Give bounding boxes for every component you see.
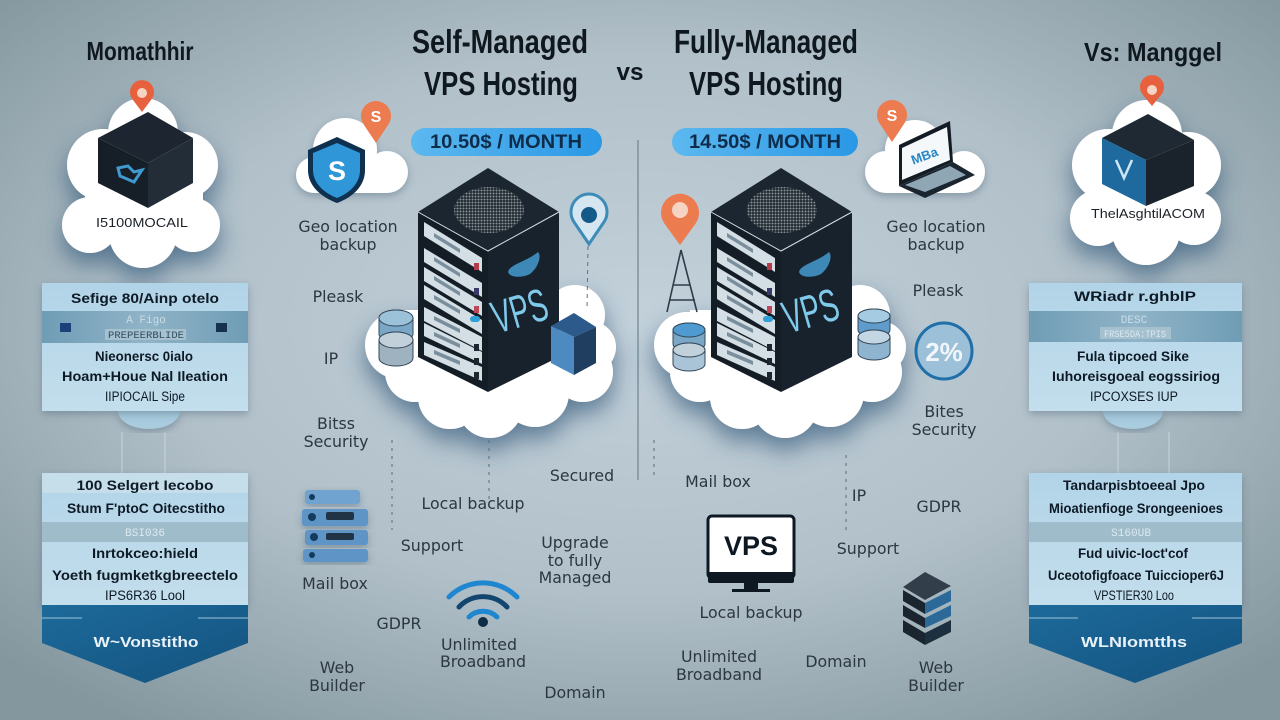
icon: database stack far right xyxy=(858,309,890,360)
left feature labels: Support xyxy=(401,536,463,555)
panel: right lower: Fud uivic-Ioct'cof xyxy=(1078,546,1188,561)
icon: VPS monitor xyxy=(708,516,794,592)
icon: dark cube xyxy=(98,112,193,208)
icon: orange pin: S xyxy=(887,108,898,125)
icon: VPS monitor: VPS xyxy=(724,531,778,561)
title: fully-managed: Fully-Managed xyxy=(674,23,858,60)
panel: left lower: IPS6R36 Lool xyxy=(105,588,185,603)
dotted connector lines xyxy=(392,440,846,530)
panel: left lower: BSI036 xyxy=(125,528,165,540)
icon: red pin xyxy=(1140,75,1164,106)
right feature labels: Geo location xyxy=(886,217,986,236)
left feature labels: Unlimited xyxy=(441,635,517,654)
left feature labels: Builder xyxy=(309,676,365,695)
title: self-managed: VPS Hosting xyxy=(424,65,578,102)
right feature labels: Local backup xyxy=(699,603,803,622)
panel: left lower: Inrtokceo:hield xyxy=(92,546,198,561)
left feature labels: Broadband xyxy=(440,652,526,671)
cloud caption: ThelAsghtilACOM xyxy=(1091,206,1205,221)
vs label: vs xyxy=(616,59,644,86)
ribbon: right: WLNIomtths xyxy=(1081,634,1187,651)
icon: orange pin with tower xyxy=(661,194,699,312)
small cloud with laptop xyxy=(865,100,985,198)
server: fully-managed: VPS xyxy=(777,278,845,343)
left feature labels: backup xyxy=(319,235,377,254)
cloud caption: I5100MOCAIL xyxy=(96,215,188,230)
panel: right lower: Mioatienfioge Srongeenioes xyxy=(1049,501,1223,516)
price pill: fully-managed: 14.50$ / MONTH xyxy=(689,132,841,153)
right feature labels: Mail box xyxy=(685,472,751,491)
panel: right lower: VPSTIER30 Loo xyxy=(1094,588,1174,603)
ribbon: left xyxy=(42,605,248,683)
right feature labels: backup xyxy=(907,235,965,254)
icon: database stack right xyxy=(673,323,705,371)
left feature labels: to fully xyxy=(548,551,602,570)
left feature labels: Local backup xyxy=(421,494,525,513)
ribbon: right xyxy=(1029,605,1242,683)
panel: left upper: Nieonersc 0ialo xyxy=(95,349,193,364)
left feature labels: IP xyxy=(324,349,338,368)
left feature labels: Mail box xyxy=(302,574,368,593)
left feature labels: Managed xyxy=(539,568,611,587)
left feature labels: Domain xyxy=(544,683,606,702)
title: fully-managed xyxy=(674,23,858,102)
icon: percent dial: 2% xyxy=(925,337,963,367)
icon: wifi xyxy=(449,583,517,627)
price pill: self-managed xyxy=(411,128,602,156)
icon: shield: S xyxy=(328,156,346,186)
blue logo xyxy=(508,252,540,277)
left feature labels: Upgrade xyxy=(541,533,609,552)
icon: stacked servers xyxy=(302,490,368,562)
panel: left upper: Hoam+Houe Nal Ileation xyxy=(62,369,228,384)
left feature labels: Pleask xyxy=(313,287,364,306)
server: self-managed: VPS xyxy=(486,278,554,343)
panel: right upper: IPCOXSES IUP xyxy=(1090,389,1178,404)
right feature labels: Security xyxy=(912,420,976,439)
ribbon: left: W~Vonstitho xyxy=(94,634,198,651)
panel: right lower xyxy=(1029,473,1242,605)
blue logo xyxy=(799,252,831,277)
right feature labels: Pleask xyxy=(913,281,964,300)
price pill: fully-managed xyxy=(672,128,858,156)
panel: left upper xyxy=(42,283,248,429)
panel: right lower: Tandarpisbtoeeal Jpo xyxy=(1063,478,1205,493)
right feature labels: Builder xyxy=(908,676,964,695)
right feature labels: Domain xyxy=(805,652,867,671)
left feature labels: Web xyxy=(320,658,354,677)
small cloud with shield xyxy=(296,101,408,203)
cloud: right server base xyxy=(654,285,906,438)
right feature labels: Web xyxy=(919,658,953,677)
server: self-managed xyxy=(418,168,559,392)
icon: percent dial xyxy=(916,323,972,379)
right feature labels: Support xyxy=(837,539,899,558)
server: fully-managed xyxy=(711,168,852,392)
right feature labels: Bites xyxy=(924,402,964,421)
left feature labels xyxy=(298,217,614,702)
icon: location pin blue xyxy=(571,194,607,244)
panel: left lower: 100 Selgert Iecobo xyxy=(76,478,214,493)
panel: left upper: A Figo xyxy=(126,315,166,327)
left feature labels: GDPR xyxy=(377,614,421,633)
rack units xyxy=(424,222,482,381)
price pill: self-managed: 10.50$ / MONTH xyxy=(430,132,582,153)
panel: left lower: Stum F'ptoC Oitecstitho xyxy=(67,501,225,516)
panel: right upper: FRSE5DA:TPIS xyxy=(1104,330,1166,341)
panel: left lower: Yoeth fugmketkgbreectelo xyxy=(52,568,238,583)
cloud: left server base xyxy=(365,285,616,438)
left feature labels: Bitss xyxy=(317,414,355,433)
right heading: Vs: Manggel xyxy=(1084,37,1222,67)
panel: right lower: Uceotofigfoace Tuiccioper6J xyxy=(1048,568,1224,583)
left feature labels: Geo location xyxy=(298,217,398,236)
panel: left lower xyxy=(42,473,248,605)
rack units xyxy=(717,222,775,381)
icon: blue box xyxy=(551,313,596,375)
left cloud with cube xyxy=(62,80,220,268)
icon: orange pin xyxy=(130,80,154,112)
right cloud with cube xyxy=(1070,75,1221,265)
icon: blue cube xyxy=(1102,114,1194,206)
title: fully-managed: VPS Hosting xyxy=(689,65,843,102)
left feature labels: Secured xyxy=(550,466,614,485)
panel: right upper xyxy=(1029,283,1242,429)
panel: right upper: Fula tipcoed Sike xyxy=(1077,349,1189,364)
right feature labels xyxy=(676,217,986,695)
left feature labels: Security xyxy=(304,432,368,451)
panel: right upper: WRiadr r.ghblP xyxy=(1074,289,1196,304)
panel: left upper: Sefige 80/Ainp otelo xyxy=(71,291,219,306)
right feature labels: GDPR xyxy=(917,497,961,516)
left heading: Momathhir xyxy=(86,36,194,66)
panel: left upper: PREPEERBLIDE xyxy=(108,331,184,342)
panel: left upper: IIPIOCAIL Sipe xyxy=(105,389,185,404)
icon: server stack xyxy=(903,572,951,645)
icon: orange dollar pin: S xyxy=(371,109,382,126)
panel: right upper: DESC xyxy=(1121,315,1148,327)
right feature labels: Unlimited xyxy=(681,647,757,666)
right feature labels: Broadband xyxy=(676,665,762,684)
panel: right lower: S160UB xyxy=(1111,528,1151,540)
icon: laptop: MBa xyxy=(909,144,941,168)
panel: right upper: Iuhoreisgoeal eogssiriog xyxy=(1052,369,1220,384)
title: self-managed xyxy=(412,23,588,102)
icon: database stack left xyxy=(379,310,413,366)
title: self-managed: Self-Managed xyxy=(412,23,588,60)
right feature labels: IP xyxy=(852,486,866,505)
